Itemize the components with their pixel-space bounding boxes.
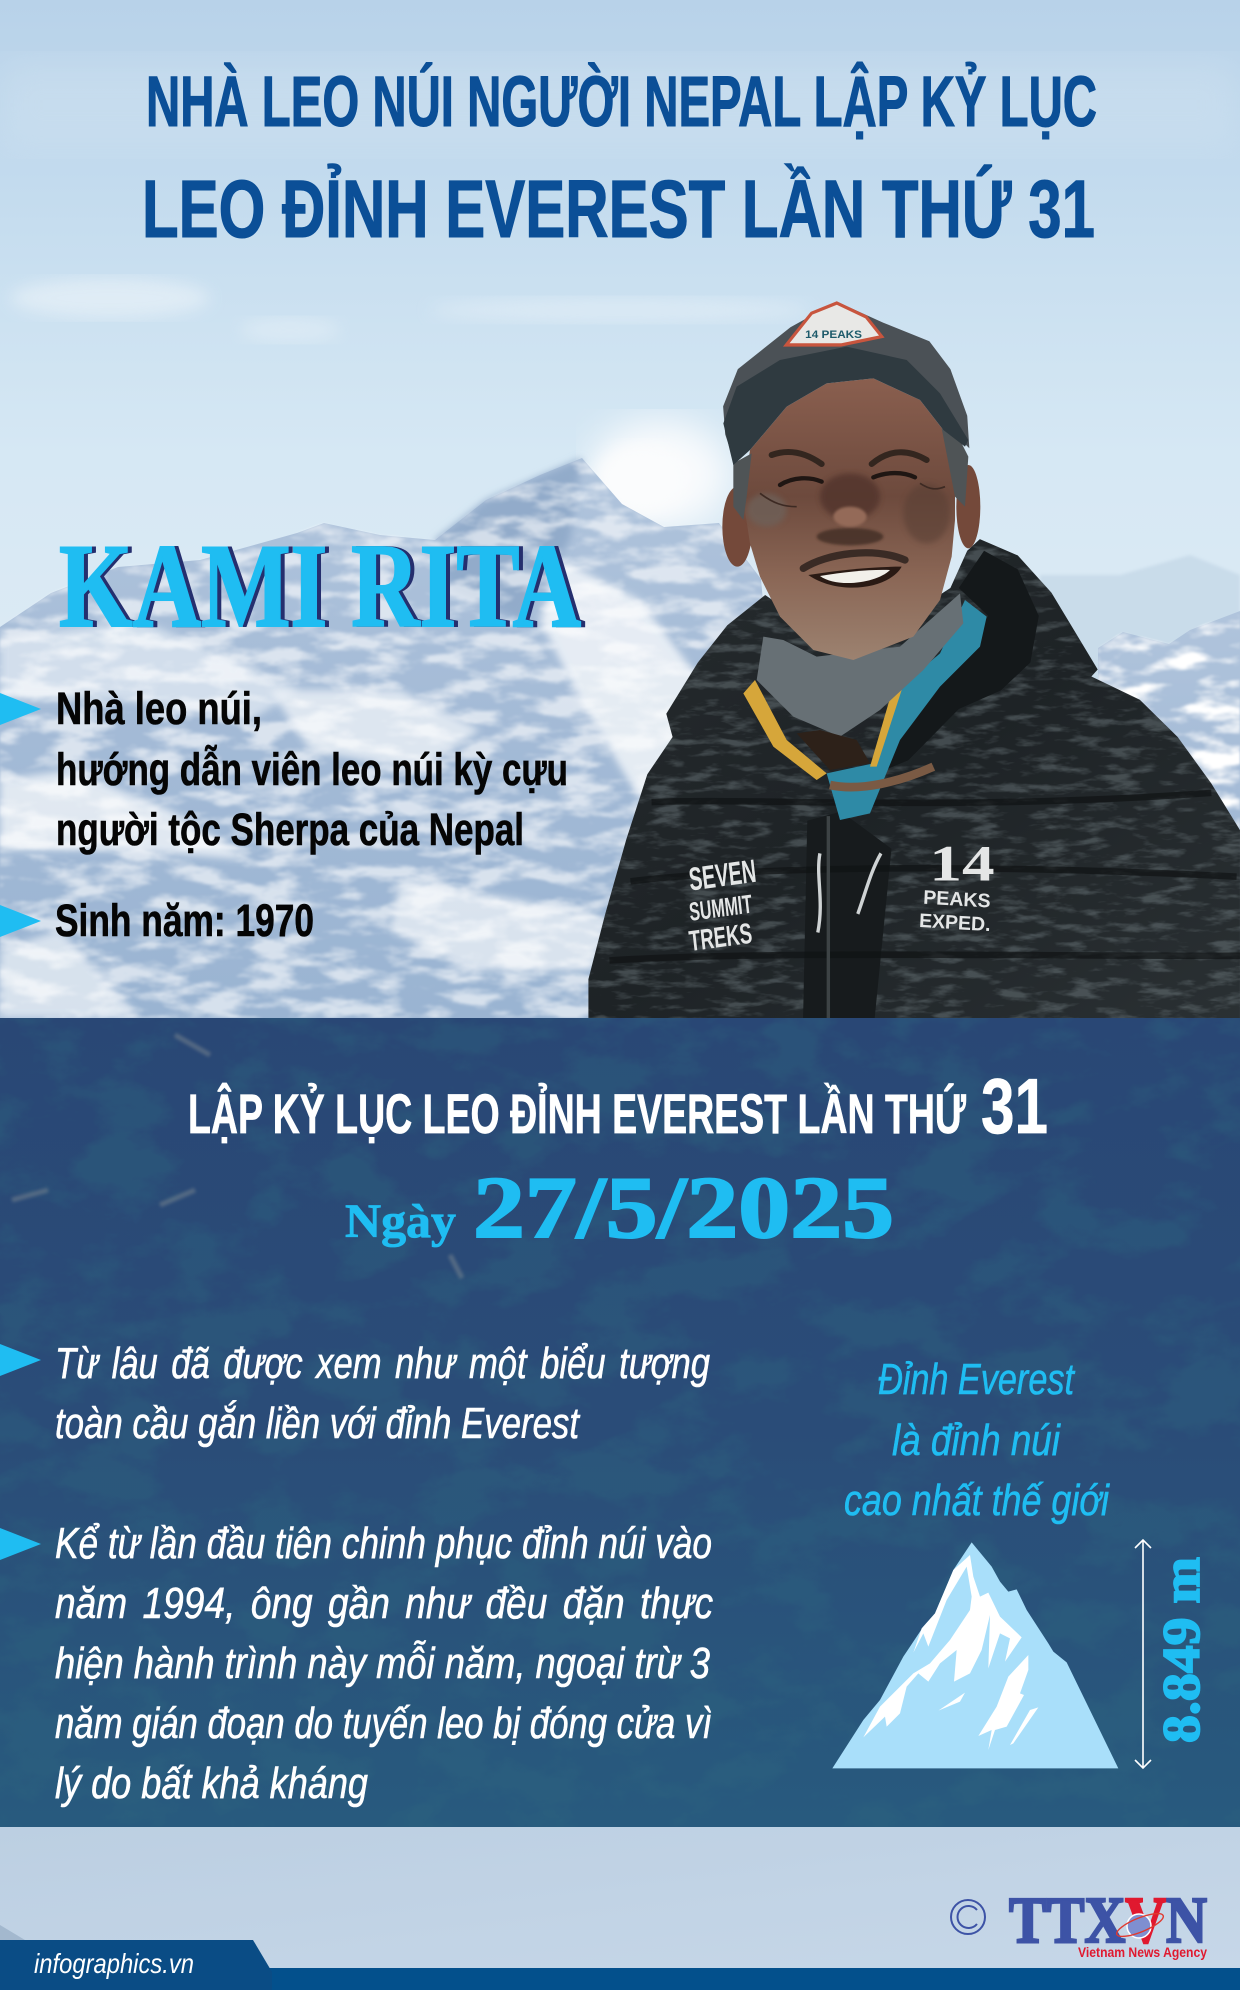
arrow marker [0, 1344, 41, 1376]
logo: TTXVN: Vietnam News Agency [1078, 1944, 1207, 1960]
copyright mark [951, 1900, 985, 1934]
panel: sky and mountain background [0, 0, 1240, 1018]
text: Từ lâu đã được xem như một biểu tượng [55, 1339, 710, 1388]
date: Ngày [345, 1195, 456, 1248]
text: năm 1994, ông gần như đều đặn thực [55, 1579, 713, 1628]
heading: Kami Rita: KAMI RITA [59, 519, 581, 652]
height label: 8.849 m [1153, 1557, 1211, 1743]
collar and gaiter [743, 593, 987, 820]
hair [733, 428, 968, 520]
jacket logo: 14 Peaks Exped: 14 [929, 835, 995, 892]
text: hiện hành trình này mỗi năm, ngoại trừ 3 [55, 1639, 710, 1688]
icon: mountain [832, 1542, 1118, 1768]
text: năm gián đoạn do tuyến leo bị đóng cửa vì [55, 1699, 712, 1748]
profile bullet 1 [0, 683, 568, 855]
jacket logo: Seven Summit Treks: SUMMIT [688, 891, 754, 927]
text: lý do bất khả kháng [55, 1759, 368, 1808]
bullet: global symbol [0, 1339, 710, 1448]
callout: highest peak: là đỉnh núi [892, 1416, 1061, 1465]
arrow marker [0, 1528, 41, 1560]
profile bullet 2 [0, 895, 314, 946]
occupation text [56, 683, 568, 855]
jacket logo: 14 Peaks Exped: PEAKS [923, 886, 991, 912]
panel: footer [0, 1827, 1240, 1990]
text: Kể từ lần đầu tiên chinh phục đỉnh núi vào [55, 1519, 712, 1568]
cap badge text: 14 PEAKS [805, 329, 862, 341]
ears [722, 487, 752, 567]
callout: highest peak [844, 1355, 1110, 1525]
jacket logo: 14 Peaks Exped [919, 835, 995, 935]
face [743, 378, 955, 660]
arrow: height span [1135, 1540, 1151, 1768]
arrow marker [0, 905, 41, 937]
text: toàn cầu gắn liền với đỉnh Everest [55, 1399, 580, 1448]
photo: portrait of Kami Rita [588, 302, 1240, 1019]
occupation text: người tộc Sherpa của Nepal [56, 804, 524, 855]
text [55, 1339, 710, 1448]
title [142, 62, 1097, 255]
source website: infographics.vn [34, 1948, 194, 1979]
cap brim [723, 347, 968, 465]
jacket logo: 14 Peaks Exped: EXPED. [919, 909, 991, 935]
text [55, 1519, 713, 1808]
smile [808, 567, 902, 588]
date [345, 1160, 894, 1257]
arrow marker [0, 693, 41, 725]
occupation text: hướng dẫn viên leo núi kỳ cựu [56, 744, 568, 795]
bullet: climbing history [0, 1519, 713, 1808]
callout: highest peak: cao nhất thế giới [844, 1476, 1110, 1525]
record heading: 31 [981, 1062, 1048, 1150]
jacket logo: Seven Summit Treks: TREKS [687, 917, 754, 957]
date: 27/5/2025 [473, 1160, 894, 1257]
footer strip [0, 1968, 1240, 1990]
callout: highest peak: Đỉnh Everest [878, 1355, 1075, 1404]
birth year: Sinh năm: 1970 [55, 895, 314, 946]
jacket logo: Seven Summit Treks [687, 852, 758, 957]
occupation text: Nhà leo núi, [56, 683, 262, 734]
record heading [188, 1062, 1048, 1150]
logo: TTXVN: TTXVN [1009, 1884, 1207, 1957]
source tab [0, 1940, 272, 1990]
jacket and cap crown [588, 302, 1240, 1019]
cap crown [723, 302, 969, 460]
jacket logo: Seven Summit Treks: SEVEN [687, 852, 758, 898]
panel: record section [0, 1018, 1240, 1827]
head [722, 347, 980, 660]
